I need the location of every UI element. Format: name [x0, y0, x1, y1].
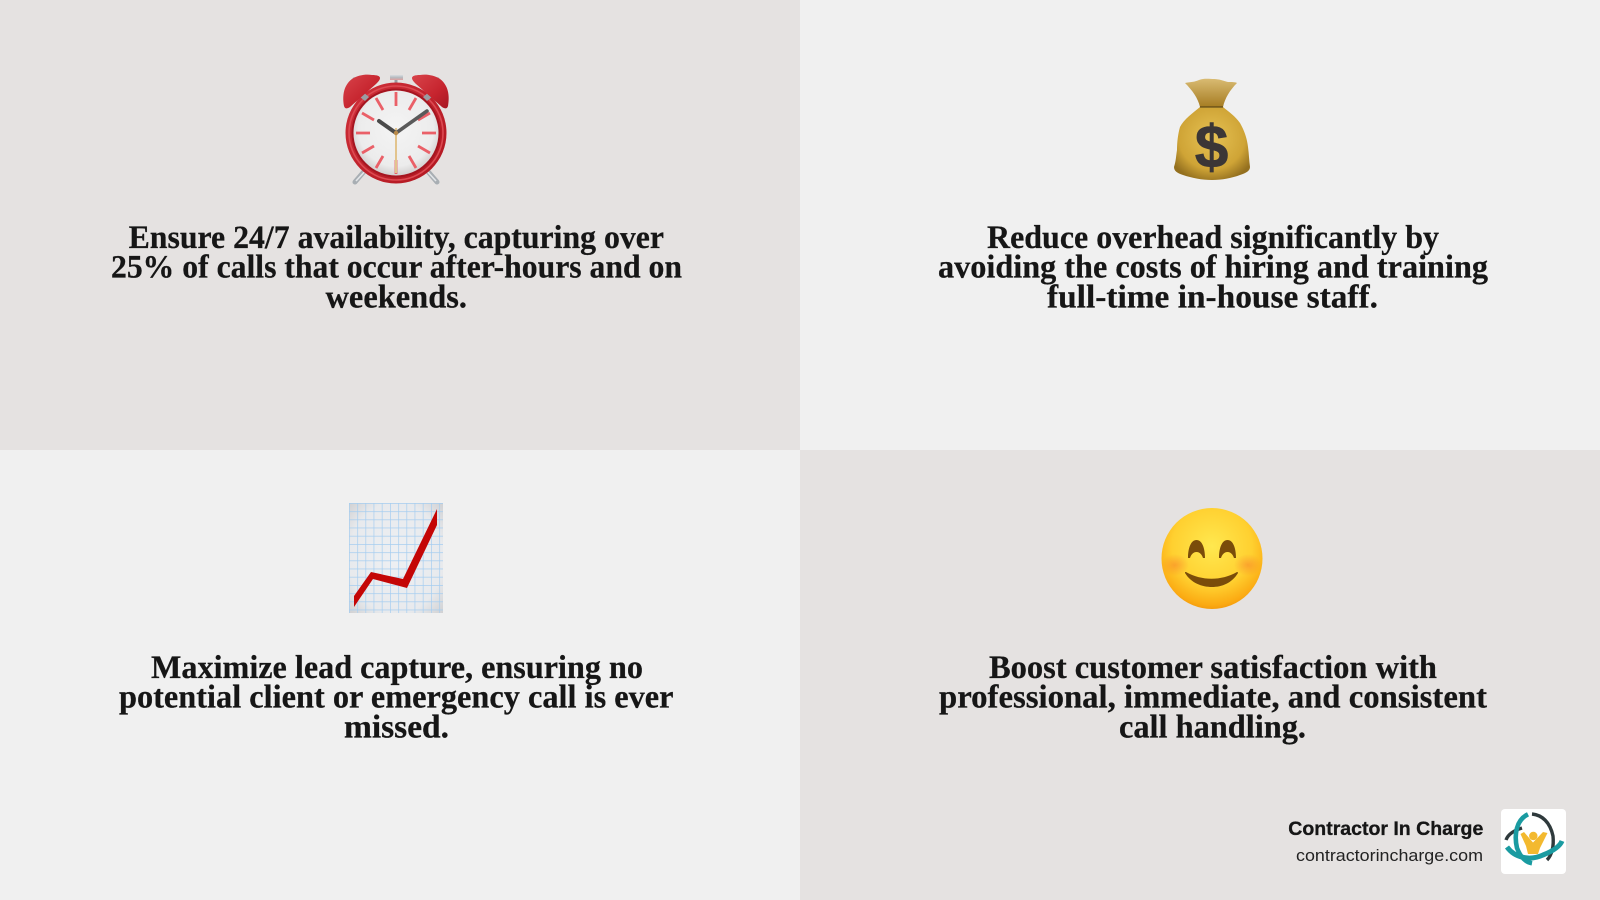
icon: smiling face [1161, 508, 1262, 609]
text: lead capture: potential client or emergency call is ever [119, 680, 674, 716]
icon: money bag [1174, 79, 1250, 180]
text: satisfaction: Boost customer satisfaction with [989, 650, 1437, 686]
brand block [1288, 809, 1566, 874]
text: lead capture: Maximize lead capture, ensuring no [151, 650, 643, 686]
text: overhead: avoiding the costs of hiring and training [938, 250, 1488, 286]
panel: availability [0, 0, 800, 450]
text: availability: Ensure 24/7 availability, capturing over [129, 220, 664, 256]
text: satisfaction [939, 650, 1487, 746]
icon: alarm clock [343, 75, 449, 184]
icon: chart increasing [349, 503, 443, 613]
text: satisfaction: call handling. [1119, 710, 1306, 746]
icon glyph: dollar sign: $ [1195, 114, 1228, 180]
panel: satisfaction [800, 450, 1600, 900]
text: availability: weekends. [326, 280, 467, 316]
panel: overhead [800, 0, 1600, 450]
text: overhead [938, 220, 1488, 316]
logo [1501, 809, 1566, 874]
text: lead capture [119, 650, 674, 746]
text: lead capture: missed. [344, 710, 449, 746]
text: overhead: Reduce overhead significantly by [987, 220, 1439, 256]
panel: lead capture [0, 450, 800, 900]
text: availability: 25% of calls that occur after-hours and on [111, 250, 682, 286]
text: satisfaction: professional, immediate, and consistent [939, 680, 1487, 716]
text: availability [111, 220, 682, 316]
brand url: contractorincharge.com [1296, 847, 1483, 865]
text: overhead: full-time in-house staff. [1047, 280, 1378, 316]
brand name: Contractor In Charge [1288, 819, 1483, 840]
